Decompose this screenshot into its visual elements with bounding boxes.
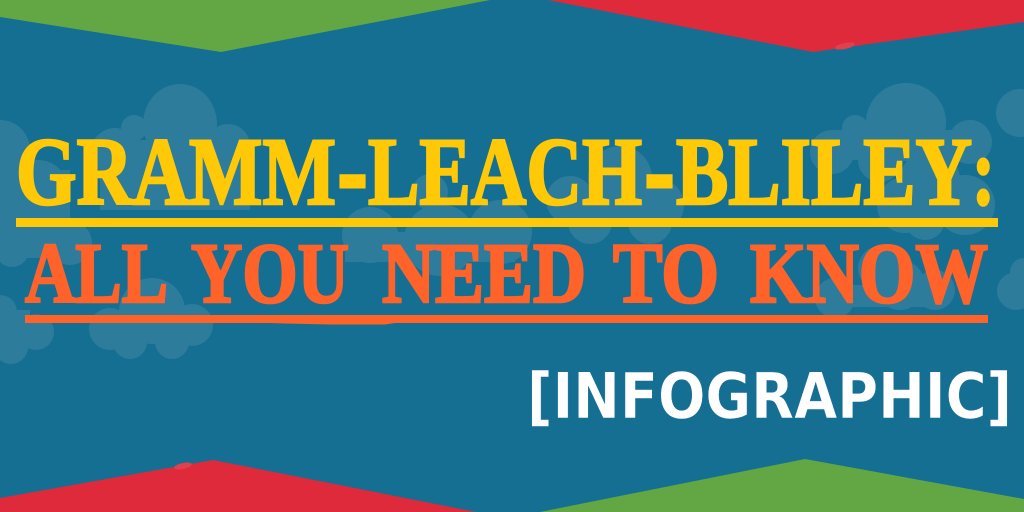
- banner: bottom red: [0, 460, 476, 512]
- banner: top red: [548, 0, 1024, 52]
- heading: Gramm-Leach-Bliley: LEACH: [368, 118, 642, 225]
- cloud pattern: [0, 83, 1024, 364]
- cloud: lower right: [815, 246, 955, 318]
- banner: top green: [0, 0, 490, 52]
- subheading: all you need to know: TO: [613, 225, 719, 321]
- subheading: all you need to know: KNOW: [750, 225, 988, 321]
- heading: Gramm-Leach-Bliley: -: [339, 118, 366, 225]
- subheading: all you need to know: NEED: [382, 225, 586, 321]
- heading: Gramm-Leach-Bliley: [16, 118, 995, 225]
- heading: Gramm-Leach-Bliley: GRAMM: [16, 118, 336, 225]
- cloud: far left: [0, 120, 92, 267]
- cloud: right edge lower: [997, 258, 1024, 310]
- subheading: all you need to know: YOU: [191, 225, 349, 321]
- cloud: lower left edge: [0, 295, 54, 364]
- heading: Gramm-Leach-Bliley: -: [646, 118, 673, 225]
- heading: Gramm-Leach-Bliley: :: [972, 118, 995, 225]
- cloud: centre left: [342, 174, 532, 276]
- subheading: all you need to know: [25, 225, 988, 321]
- orange rule: [25, 315, 988, 324]
- cloud: right edge top: [996, 89, 1024, 137]
- cloud: right middle: [877, 150, 995, 240]
- cloud: top left: [91, 84, 250, 210]
- yellow rule: [16, 218, 998, 227]
- banner: bottom green: [540, 459, 1024, 512]
- cloud: centre: [546, 146, 684, 244]
- highlight: top red tip: [835, 41, 855, 51]
- highlight: bottom red tip: [174, 461, 192, 471]
- subheading: all you need to know: ALL: [25, 225, 168, 321]
- cloud: lower left: [89, 278, 213, 359]
- cloud: top right: [810, 83, 992, 182]
